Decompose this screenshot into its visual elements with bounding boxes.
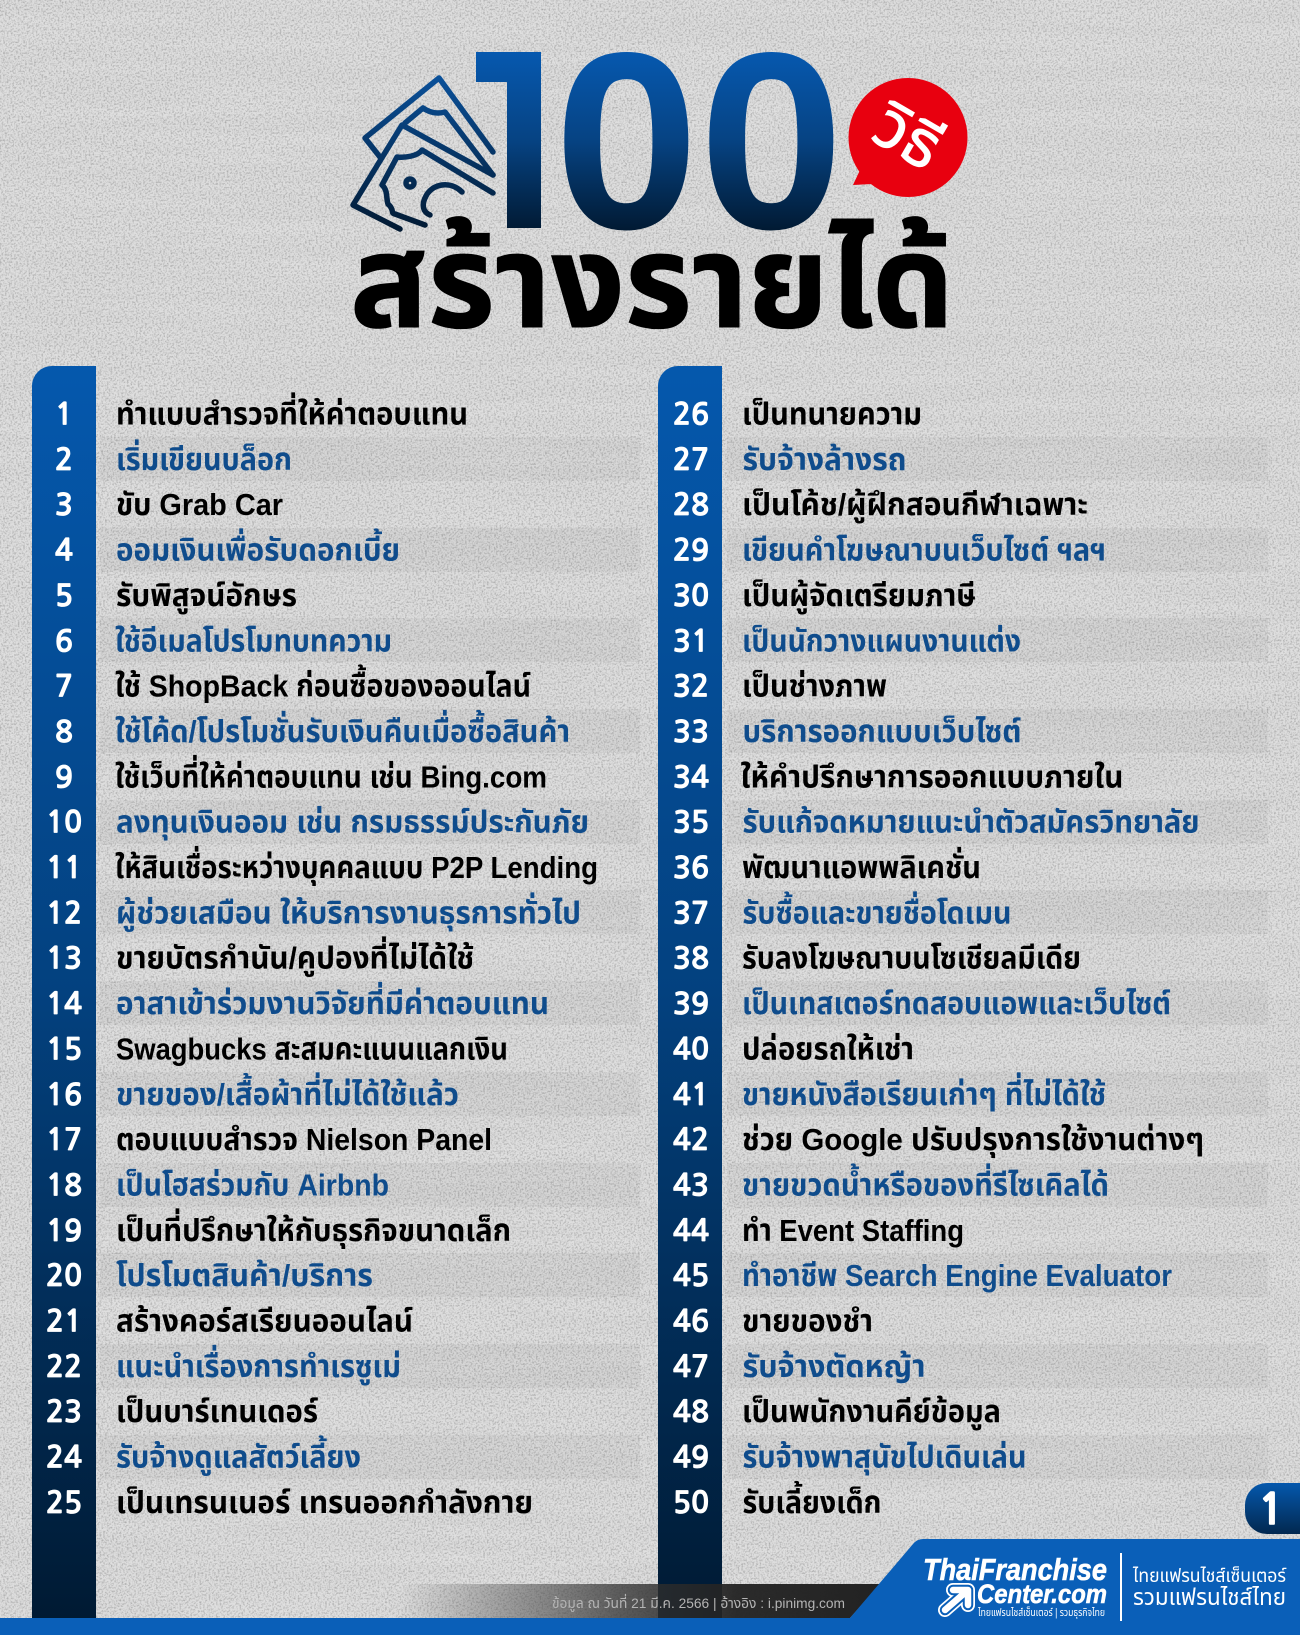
item 11: ให้สินเชื่อระหว่างบุคคลแบบ P2P Lending	[115, 845, 598, 886]
logo: ThaiFranchise Center.com: ThaiFranchise	[923, 1552, 1107, 1587]
item 33: บริการออกแบบเว็บไซต์	[742, 714, 1022, 749]
item 12: 12	[46, 899, 82, 928]
item 32: เป็นช่างภาพ	[742, 669, 887, 704]
item 21: 21	[46, 1308, 82, 1336]
item 45: 45	[673, 1262, 709, 1291]
item 20: โปรโมตสินค้า/บริการ	[116, 1258, 373, 1293]
item 17: ตอบแบบสำรวจ Nielson Panel	[116, 1122, 492, 1157]
item 31: เป็นนักวางแผนงานแต่ง	[742, 623, 1021, 658]
item 31: 31	[673, 627, 709, 656]
item 13: ขายบัตรกำนัน/คูปองที่ไม่ได้ใช้	[116, 936, 474, 977]
item 19	[46, 1208, 511, 1249]
item 36: พัฒนาแอพพลิเคชั่น	[742, 846, 981, 885]
item 46: 46	[673, 1308, 709, 1336]
footer divider and tagline: รวมแฟรนไชส์ไทย	[1133, 1584, 1286, 1610]
title number 100: 00	[554, 1, 844, 282]
source caption bar: ข้อมูล ณ วันที่ 21 มี.ค. 2566 | อ้างอิง : i.pinimg.com	[552, 1593, 845, 1612]
item 14: 14	[46, 990, 82, 1019]
item 41: 41	[673, 1081, 709, 1110]
item 43: 43	[673, 1172, 709, 1200]
item 17: 17	[46, 1126, 82, 1155]
page number badge: 1	[1258, 1490, 1284, 1531]
title number 100: 1	[468, 3, 552, 281]
item 28: 28	[673, 491, 709, 520]
item 35: 35	[673, 809, 709, 838]
item 28: เป็นโค้ช/ผู้ฝึกสอนกีฬาเฉพาะ	[742, 487, 1088, 523]
item 26	[673, 396, 922, 432]
item 24: รับจ้างดูแลสัตว์เลี้ยง	[116, 1434, 361, 1476]
item 33: 33	[673, 718, 709, 747]
item 12: ผู้ช่วยเสมือน ให้บริการงานธุรการทั่วไป	[116, 891, 581, 931]
footer divider and tagline: ไทยแฟรนไชส์เซ็นเตอร์	[1132, 1566, 1287, 1587]
logo: ThaiFranchise Center.com	[923, 1552, 1107, 1619]
item 36: 36	[673, 854, 709, 883]
item 40: ปล่อยรถให้เช่า	[742, 1031, 914, 1066]
item 4	[55, 527, 400, 568]
item 20: 20	[46, 1262, 82, 1291]
title: สร้างรายได้: สร้างรายได้	[350, 209, 954, 355]
item 24: 24	[46, 1444, 82, 1473]
item 15: Swagbucks สะสมคะแนนแลกเงิน	[116, 1031, 508, 1066]
item 41: ขายหนังสือเรียนเก่าๆ ที่ไม่ได้ใช้	[742, 1072, 1106, 1112]
footer divider and tagline	[1120, 1553, 1287, 1621]
item 32: 32	[673, 673, 709, 702]
item 22: แนะนำเรื่องการทำเรซูเม่	[116, 1344, 401, 1385]
item 8: ใช้โค้ด/โปรโมชั่นรับเงินคืนเมื่อซื้อสินค้า	[115, 709, 570, 749]
item 14: อาสาเข้าร่วมงานวิจัยที่มีค่าตอบแทน	[116, 981, 549, 1021]
item 46	[673, 1304, 873, 1338]
item 27	[673, 442, 906, 477]
item 27: รับจ้างล้างรถ	[742, 442, 906, 477]
item 4: ออมเงินเพื่อรับดอกเบี้ย	[116, 527, 400, 568]
item 1: 1	[55, 400, 73, 430]
item 8: 8	[55, 718, 73, 747]
item 23: เป็นบาร์เทนเดอร์	[116, 1394, 318, 1429]
item 48: เป็นพนักงานคีย์ข้อมูล	[742, 1394, 1001, 1430]
item 6: 6	[55, 627, 73, 656]
item 6: ใช้อีเมลโปรโมทบทความ	[115, 623, 392, 658]
item 36	[673, 846, 981, 885]
item 40	[673, 1031, 914, 1066]
item 25: 25	[46, 1489, 82, 1518]
item 37	[673, 890, 1012, 930]
item 10: ลงทุนเงินออม เช่น กรมธรรม์ประกันภัย	[116, 805, 589, 841]
icon: banknotes	[353, 78, 493, 229]
item 10: 10	[46, 809, 82, 838]
page number badge	[1245, 1483, 1300, 1534]
item 25: เป็นเทรนเนอร์ เทรนออกกำลังกาย	[116, 1485, 533, 1520]
item 23: 23	[46, 1398, 82, 1427]
item 42: 42	[673, 1126, 709, 1155]
item 3: 3	[55, 491, 73, 520]
item 27: 27	[673, 446, 709, 475]
item 39: 39	[673, 990, 709, 1019]
item 16: 16	[46, 1081, 82, 1110]
item 44: ทำ Event Staffing	[742, 1213, 964, 1248]
item 38: 38	[673, 945, 709, 974]
item 9: 9	[55, 763, 73, 792]
item 49: รับจ้างพาสุนัขไปเดินเล่น	[742, 1440, 1026, 1476]
item 49: 49	[673, 1444, 709, 1473]
item 13: 13	[46, 945, 82, 974]
item 2	[55, 439, 292, 477]
item 48: 48	[673, 1398, 709, 1427]
item 22: 22	[46, 1353, 82, 1382]
item 2: 2	[55, 446, 73, 475]
item 19: 19	[46, 1217, 82, 1246]
item 4: 4	[55, 536, 73, 566]
item 13	[46, 936, 474, 977]
item 1: ทำแบบสำรวจที่ให้ค่าตอบแทน	[116, 391, 468, 432]
item 29: เขียนคำโฆษณาบนเว็บไซต์ ฯลฯ	[742, 532, 1106, 568]
item 44	[673, 1213, 964, 1248]
item 34: 34	[673, 763, 709, 792]
panel: left column number bar	[32, 366, 96, 1618]
item 42: ช่วย Google ปรับปรุงการใช้งานต่างๆ	[742, 1122, 1204, 1158]
item 11	[46, 845, 598, 886]
item 18: 18	[46, 1172, 82, 1200]
logo: ThaiFranchise Center.com: ไทยแฟรนไชส์เซ็นเตอร์ | รวมธุรกิจไทย	[977, 1607, 1105, 1619]
item 7: ใช้ ShopBack ก่อนซื้อของออนไลน์	[115, 664, 531, 704]
list: items 1 to 25	[46, 391, 598, 1520]
item 44: 44	[673, 1217, 709, 1246]
item 47: รับจ้างตัดหญ้า	[742, 1349, 926, 1384]
item 50: รับเลี้ยงเด็ก	[742, 1480, 882, 1520]
panel: right column number bar	[658, 366, 722, 1618]
item 11: 11	[46, 854, 82, 883]
item 45: ทำอาชีพ Search Engine Evaluator	[742, 1258, 1172, 1293]
item 22	[46, 1344, 401, 1385]
item 3	[55, 487, 283, 522]
item 50: 50	[673, 1489, 709, 1518]
item 35: รับแก้จดหมายแนะนำตัวสมัครวิทยาลัย	[742, 805, 1200, 840]
footer blue band	[0, 1539, 1300, 1635]
item 40: 40	[673, 1035, 709, 1064]
item 19: เป็นที่ปรึกษาให้กับธุรกิจขนาดเล็ก	[116, 1208, 511, 1249]
item 15: 15	[46, 1035, 82, 1064]
logo: ThaiFranchise Center.com: Center.com	[977, 1579, 1107, 1609]
item 5: 5	[55, 582, 73, 611]
item 38: รับลงโฆษณาบนโซเชียลมีเดีย	[742, 941, 1081, 976]
item 37: รับซื้อและขายชื่อโดเมน	[742, 890, 1012, 930]
item 34: ให้คำปรึกษาการออกแบบภายใน	[740, 759, 1124, 794]
item 30: 30	[673, 582, 709, 611]
item 5: รับพิสูจน์อักษร	[116, 578, 297, 614]
item 30: เป็นผู้จัดเตรียมภาษี	[742, 578, 976, 614]
item 18: เป็นโฮสร่วมกับ Airbnb	[116, 1168, 389, 1202]
item 37: 37	[673, 899, 709, 928]
item 41	[673, 1072, 1106, 1112]
title number 100	[476, 52, 834, 230]
item 24	[46, 1434, 361, 1476]
item 32	[673, 669, 887, 704]
item 7: 7	[55, 673, 73, 702]
item 50	[673, 1480, 882, 1520]
item 3: ขับ Grab Car	[116, 487, 283, 522]
item 26: เป็นทนายความ	[742, 396, 922, 432]
item 21: สร้างคอร์สเรียนออนไลน์	[116, 1304, 413, 1338]
red speech bubble	[848, 78, 968, 197]
source caption bar	[400, 1584, 880, 1618]
item 46: ขายของชำ	[742, 1304, 873, 1338]
item 29: 29	[673, 536, 709, 566]
item 39: เป็นเทสเตอร์ทดสอบแอพและเว็บไซต์	[742, 986, 1171, 1021]
item 26: 26	[673, 400, 709, 430]
item 47: 47	[673, 1353, 709, 1382]
red speech bubble: วิธี	[861, 88, 955, 184]
icon: arrow	[945, 1590, 968, 1610]
item 16: ขายของ/เสื้อผ้าที่ไม่ได้ใช้แล้ว	[116, 1072, 459, 1112]
item 43: ขายขวดน้ำหรือของที่รีไซเคิลได้	[742, 1162, 1109, 1202]
list: items 26 to 50	[673, 396, 1204, 1520]
item 16	[46, 1072, 459, 1112]
item 2: เริ่มเขียนบล็อก	[116, 439, 292, 477]
item 9: ใช้เว็บที่ให้ค่าตอบแทน เช่น Bing.com	[115, 754, 547, 794]
